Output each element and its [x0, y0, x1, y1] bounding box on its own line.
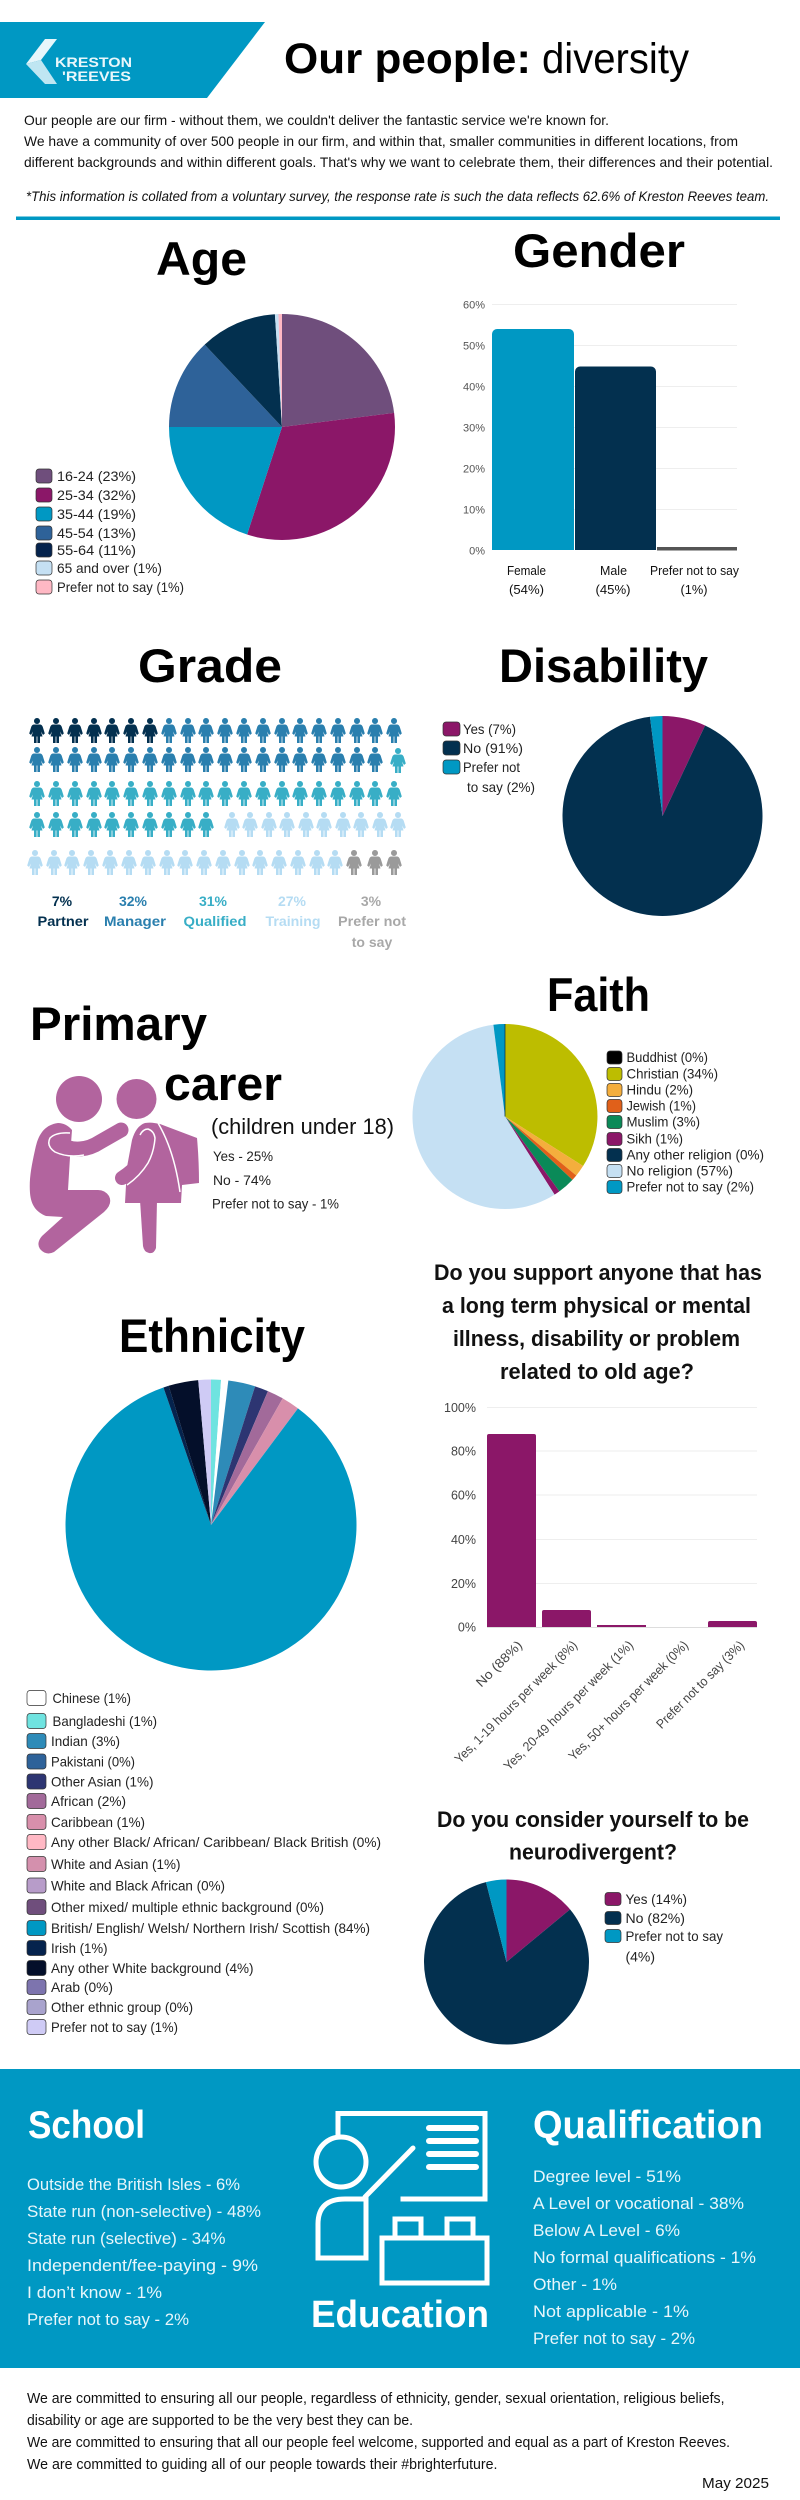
logo wordmark: [55, 54, 132, 84]
pie chart: age: [169, 314, 395, 540]
bar chart: carer support: 0%: [458, 1620, 476, 1634]
grade labels: Training: [266, 913, 320, 929]
heading: carer support question: a long term physical or mental: [442, 1293, 751, 1318]
primary carer text: No - 74%: [213, 1172, 271, 1188]
legend: disability: [443, 721, 535, 795]
people: manager: [29, 718, 402, 772]
list: school: Independent/fee-paying - 9%: [27, 2256, 258, 2275]
heading: carer support question: illness, disability or problem: [453, 1326, 740, 1351]
list: qualification: [533, 2167, 756, 2348]
bar chart: carer support: 80%: [451, 1444, 476, 1458]
bar chart: carer support: 60%: [451, 1488, 476, 1502]
closing statement: We are committed to guiding all of our people towards their #brighterfuture.: [27, 2456, 498, 2473]
legend: disability: to say (2%): [467, 779, 535, 795]
heading: Gender: Gender: [513, 224, 685, 277]
date: May 2025: [702, 2475, 769, 2492]
legend: ethnicity: White and Asian (1%): [51, 1856, 180, 1872]
people: partner: [29, 718, 158, 743]
legend: ethnicity: Other Asian (1%): [51, 1774, 154, 1790]
bar chart: gender: 40%: [463, 382, 485, 394]
legend: ethnicity: Caribbean (1%): [51, 1814, 145, 1830]
primary carer text: [211, 1114, 394, 1212]
bar chart: gender: 60%: [463, 300, 485, 312]
bar chart: carer support: [444, 1401, 757, 1773]
bar chart: gender: 10%: [463, 504, 485, 516]
gender axis labels: (45%): [596, 583, 630, 597]
heading: Faith: Faith: [547, 968, 650, 1021]
legend: ethnicity: Other ethnic group (0%): [51, 1999, 193, 2015]
legend: ethnicity: Bangladeshi (1%): [52, 1713, 157, 1729]
gender axis labels: (1%): [680, 583, 708, 597]
grade labels: 3%: [361, 893, 382, 909]
heading: carer support question: related to old age?: [500, 1359, 694, 1384]
list: school: I don’t know - 1%: [27, 2283, 162, 2302]
legend: neurodivergent: No (82%): [626, 1910, 685, 1926]
legend: ethnicity: British/ English/ Welsh/ Northern Irish/ Scottish (84%): [51, 1920, 370, 1936]
heading: Education: Education: [311, 2294, 489, 2336]
legend: ethnicity: White and Black African (0%): [51, 1878, 225, 1894]
primary carer text: Prefer not to say - 1%: [212, 1196, 339, 1212]
legend: faith: Sikh (1%): [626, 1130, 683, 1146]
bar chart: carer support: 100%: [444, 1401, 476, 1415]
intro text: different backgrounds and within different goals. That's why we want to celebrate them, their differences and their potential.: [24, 154, 773, 170]
legend: neurodivergent: [605, 1891, 723, 1964]
grade labels: 31%: [199, 893, 228, 909]
legend: neurodivergent: (4%): [626, 1948, 655, 1964]
legend: age: 16-24 (23%): [57, 468, 136, 484]
grade labels: 32%: [119, 893, 148, 909]
legend: faith: Hindu (2%): [626, 1082, 693, 1098]
grade labels: Prefer not: [338, 913, 406, 929]
gender axis labels: Male: [600, 564, 627, 578]
list: qualification: Not applicable - 1%: [533, 2302, 689, 2321]
bar chart: carer support: 20%: [451, 1577, 476, 1591]
legend: age: 25-34 (32%): [57, 487, 136, 503]
gender axis labels: Female: [507, 564, 546, 578]
legend: ethnicity: Arab (0%): [51, 1979, 113, 1995]
heading: School: School: [28, 2104, 145, 2147]
grade labels: 27%: [278, 893, 307, 909]
legend: ethnicity: Chinese (1%): [52, 1690, 131, 1706]
grade labels: to say: [352, 934, 392, 950]
heading: Grade: Grade: [138, 639, 282, 692]
gender axis labels: Prefer not to say: [650, 564, 740, 578]
heading: neurodivergent question: neurodivergent?: [509, 1840, 677, 1864]
bar: female: [492, 329, 574, 550]
list: qualification: Degree level - 51%: [533, 2167, 681, 2186]
list: school: Prefer not to say - 2%: [27, 2310, 189, 2329]
title: Our people:: [284, 35, 531, 83]
list: qualification: No formal qualifications - 1%: [533, 2248, 756, 2267]
panel: education: [0, 2069, 800, 2368]
list: qualification: Other - 1%: [533, 2275, 617, 2294]
heading: carer support question: Do you support anyone that has: [434, 1260, 762, 1285]
legend: faith: Prefer not to say (2%): [626, 1178, 754, 1194]
survey note: *This information is collated from a voluntary survey, the response rate is such the data reflects 62.6% of Kreston Reeves team.: [26, 188, 769, 204]
bar: male: [575, 366, 656, 550]
rotated category labels: Yes, 20-49 hours per week (1%): [500, 1638, 636, 1773]
legend: age: 35-44 (19%): [57, 506, 136, 522]
legend: faith: Buddhist (0%): [626, 1049, 708, 1065]
intro text: [24, 112, 773, 170]
pie chart: neurodivergent: [424, 1880, 589, 2044]
closing statement: We are committed to ensuring that all our people feel welcome, supported and equal as a part of Kreston Reeves.: [27, 2434, 730, 2451]
people: prefer not to say: [346, 850, 402, 875]
bar chart: gender: 30%: [463, 422, 485, 434]
legend: faith: No religion (57%): [626, 1162, 733, 1178]
grade labels: [38, 893, 406, 950]
closing statement: [27, 2390, 730, 2473]
list: school: State run (selective) - 34%: [27, 2229, 226, 2248]
heading: neurodivergent question: [437, 1807, 749, 1864]
pie chart: faith: [412, 1024, 597, 1209]
list: qualification: Below A Level - 6%: [533, 2221, 680, 2240]
legend: neurodivergent: Prefer not to say: [626, 1928, 723, 1944]
heading: Disability: Disability: [499, 639, 708, 692]
legend: ethnicity: Prefer not to say (1%): [51, 2019, 178, 2035]
list: school: Outside the British Isles - 6%: [27, 2175, 240, 2194]
title: [284, 35, 689, 83]
rotated category labels: Prefer not to say (3%): [653, 1638, 747, 1732]
heading: Primary carer: Primary: [30, 997, 207, 1050]
rotated category labels: No (88%): [473, 1638, 525, 1690]
closing statement: We are committed to ensuring all our people, regardless of ethnicity, gender, sexual orientation, religious beliefs,: [27, 2390, 724, 2407]
heading: carer support question: [434, 1260, 762, 1384]
heading: Qualification: Qualification: [533, 2104, 763, 2147]
legend: ethnicity: Any other Black/ African/ Caribbean/ Black British (0%): [51, 1834, 381, 1850]
legend: ethnicity: Irish (1%): [51, 1940, 108, 1956]
bar chart: gender: [463, 300, 740, 597]
header logo banner: [0, 22, 265, 98]
legend: disability: Yes (7%): [463, 721, 516, 737]
icon: Kreston Reeves arrow: [26, 39, 57, 84]
legend: disability: Prefer not: [463, 759, 520, 775]
grade labels: 7%: [52, 893, 73, 909]
legend: ethnicity: [27, 1690, 381, 2035]
grade labels: Manager: [104, 913, 167, 929]
people: qualified: [29, 748, 406, 837]
legend: faith: [607, 1049, 764, 1194]
bar chart: gender: 50%: [463, 340, 485, 352]
list: school: State run (non-selective) - 48%: [27, 2202, 261, 2221]
rotated category labels: [451, 1638, 747, 1773]
bar chart: gender: 0%: [469, 546, 485, 558]
closing statement: disability or age are supported to be the very best they can be.: [27, 2412, 413, 2429]
legend: faith: Christian (34%): [626, 1066, 718, 1082]
heading: Ethnicity: Ethnicity: [119, 1309, 305, 1362]
gender axis labels: (54%): [509, 583, 544, 597]
logo wordmark: 'REEVES: [62, 68, 131, 84]
legend: ethnicity: African (2%): [51, 1793, 126, 1809]
legend: disability: No (91%): [463, 740, 523, 756]
icon: adult and child: [30, 1076, 199, 1253]
pie chart: disability: [563, 716, 763, 916]
heading: Age: Age: [156, 232, 247, 285]
legend: faith: Jewish (1%): [626, 1098, 696, 1114]
list: qualification: A Level or vocational - 38%: [533, 2194, 744, 2213]
gender axis labels: [507, 564, 740, 597]
intro text: Our people are our firm - without them, we couldn't deliver the fantastic service we're known for.: [24, 112, 609, 128]
grade labels: Partner: [38, 913, 89, 929]
list: school: [27, 2175, 261, 2329]
list: qualification: Prefer not to say - 2%: [533, 2329, 695, 2348]
heading: Primary carer: [30, 997, 282, 1110]
legend: age: 65 and over (1%): [57, 560, 162, 576]
legend: faith: Any other religion (0%): [626, 1146, 764, 1162]
pie chart: ethnicity: [66, 1380, 357, 1670]
legend: age: [36, 468, 184, 595]
bar: prefer not to say: [657, 547, 737, 550]
logo wordmark: KRESTON: [55, 54, 132, 70]
icon: teacher at board with blocks: [316, 2114, 487, 2283]
legend: age: 45-54 (13%): [57, 525, 136, 541]
legend: ethnicity: Indian (3%): [51, 1733, 120, 1749]
heading: neurodivergent question: Do you consider yourself to be: [437, 1807, 749, 1832]
bars: [487, 1434, 757, 1627]
pictogram: grade: [27, 718, 406, 875]
bar chart: gender: 20%: [463, 464, 485, 476]
rotated category labels: Yes, 50+ hours per week (0%): [565, 1638, 691, 1763]
legend: age: 55-64 (11%): [57, 542, 136, 558]
legend: ethnicity: Other mixed/ multiple ethnic background (0%): [51, 1899, 324, 1915]
title: diversity: [542, 35, 689, 83]
heading: Primary carer: carer: [164, 1057, 282, 1110]
legend: ethnicity: Any other White background (4%): [51, 1960, 254, 1976]
legend: faith: Muslim (3%): [626, 1114, 700, 1130]
bar chart: carer support: 40%: [451, 1533, 476, 1547]
legend: ethnicity: Pakistani (0%): [51, 1754, 135, 1770]
grade labels: Qualified: [184, 913, 246, 929]
legend: age: Prefer not to say (1%): [57, 579, 184, 595]
intro text: We have a community of over 500 people in our firm, and within that, smaller communities in different locations, from: [24, 133, 738, 149]
rotated category labels: Yes, 1-19 hours per week (8%): [451, 1638, 580, 1766]
primary carer text: Yes - 25%: [213, 1148, 273, 1164]
primary carer text: (children under 18): [211, 1114, 394, 1139]
legend: neurodivergent: Yes (14%): [626, 1891, 687, 1907]
people: training: [27, 812, 406, 875]
